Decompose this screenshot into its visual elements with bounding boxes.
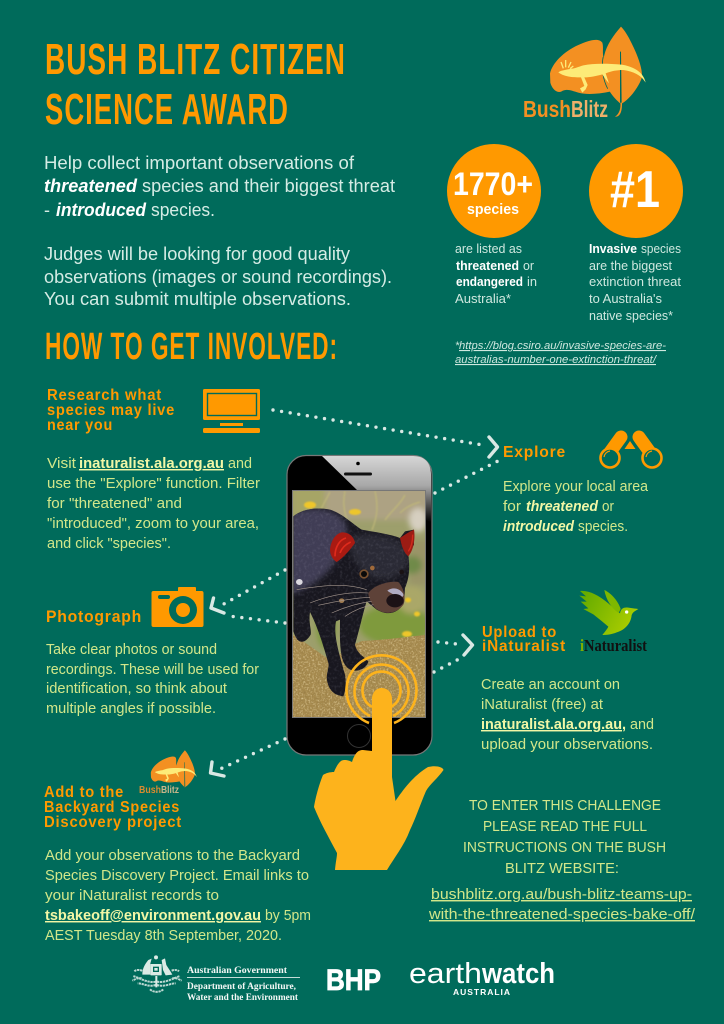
- step: add to project: tsbakeoff@environment.gov.au: [45, 908, 261, 924]
- phone photo: Tasmanian devil: [290, 486, 431, 717]
- callout: enter the challenge: BLITZ WEBSITE:: [505, 861, 619, 877]
- step: photograph: Photograph: [46, 608, 142, 626]
- step: research: and click "species".: [47, 536, 171, 552]
- step: add to project: AEST Tuesday 8th September, 2020.: [45, 928, 282, 944]
- logo: Bush Blitz: Bush: [523, 96, 571, 122]
- logo: small Bush Blitz: Bush: [139, 784, 161, 796]
- callout: enter the challenge: PLEASE READ THE FULL: [483, 819, 647, 835]
- stat: number one threat: to Australia's: [589, 291, 662, 306]
- step: research: Visit: [47, 456, 76, 472]
- arrow: phone to camera lower: [229, 616, 285, 623]
- callout: enter the challenge: bushblitz.org.au/bush-blitz-teams-up-: [431, 887, 692, 903]
- stat: number one threat: are the biggest: [589, 258, 672, 273]
- step: research: [47, 387, 260, 552]
- icon: binoculars: [600, 437, 662, 468]
- footnote link: australias-number-one-extinction-threat/: [455, 354, 657, 366]
- step: upload to iNaturalist: Upload to: [482, 624, 557, 641]
- step: research: Research what: [47, 387, 162, 404]
- touch rings: [346, 655, 416, 723]
- step: add to project: Backyard Species: [44, 799, 180, 816]
- stat: 1770+ species: 1770+: [453, 166, 533, 202]
- step: add to project: Species Discovery Project. Email links to: [45, 868, 309, 884]
- step: photograph: multiple angles if possible.: [46, 701, 216, 717]
- logo: Earthwatch Australia: AUSTRALIA: [453, 987, 510, 997]
- stat: 1770+ species: endangered: [456, 274, 523, 289]
- arrow: research to explore: [273, 410, 498, 457]
- logo: Earthwatch Australia: [409, 958, 555, 997]
- straw mound: [293, 630, 425, 717]
- intro text: You can submit multiple observations.: [44, 289, 351, 309]
- step: upload to iNaturalist: upload your observations.: [481, 737, 653, 753]
- step: explore: threatened: [526, 499, 599, 515]
- logo: BHP: BHP: [326, 964, 381, 997]
- step: research: near you: [47, 417, 113, 434]
- step: research: use the "Explore" function. Filter: [47, 476, 260, 492]
- stat: number one threat: extinction threat: [589, 274, 681, 289]
- stat: 1770+ species: are listed as: [455, 241, 522, 256]
- step: research: "introduced", zoom to your area,: [47, 516, 259, 532]
- stat: number one threat: #1: [610, 161, 660, 219]
- heading: how to get involved: HOW TO GET INVOLVED:: [45, 326, 338, 368]
- step: explore: for: [503, 499, 521, 515]
- logo: small Bush Blitz: [139, 750, 197, 796]
- logo: iNaturalist: [579, 590, 647, 655]
- text: Australian Government: Water and the Environment: [187, 993, 299, 1003]
- step: add to project: your iNaturalist records to: [45, 888, 219, 904]
- arrow: phone to explore: [435, 461, 498, 493]
- callout: enter the challenge: TO ENTER THIS CHALLENGE: [469, 798, 661, 814]
- step: research: species may live: [47, 402, 175, 419]
- step: upload to iNaturalist: [481, 624, 654, 753]
- step: explore: or: [602, 499, 614, 515]
- intro text: Help collect important observations of: [44, 153, 355, 173]
- footnote link: [455, 340, 666, 366]
- step: upload to iNaturalist: inaturalist.ala.org.au,: [481, 717, 626, 733]
- intro text: [44, 153, 395, 309]
- step: explore: introduced: [503, 519, 575, 535]
- step: photograph: identification, so think about: [46, 681, 227, 697]
- step: research: and: [228, 456, 252, 472]
- stat: 1770+ species: threatened: [456, 258, 519, 273]
- arrow: phone to upload: [438, 635, 472, 655]
- intro text: -: [44, 200, 50, 220]
- title: BUSH BLITZ CITIZEN: [45, 35, 346, 84]
- text: Australian Government: Australian Government: [187, 966, 288, 976]
- step: research: for "threatened" and: [47, 496, 182, 512]
- step: upload to iNaturalist: and: [630, 717, 654, 733]
- title: SCIENCE AWARD: [45, 85, 289, 134]
- stat: 1770+ species: species: [467, 201, 519, 218]
- step: research: inaturalist.ala.org.au: [79, 456, 224, 472]
- step: photograph: recordings. These will be used for: [46, 662, 259, 678]
- callout: enter the challenge: with-the-threatened-species-bake-off/: [428, 907, 696, 923]
- step: explore: Explore: [503, 444, 566, 461]
- intro text: species and their biggest threat: [142, 176, 395, 196]
- intro text: Judges will be looking for good quality: [44, 244, 350, 264]
- intro text: observations (images or sound recordings).: [44, 267, 392, 287]
- logo: iNaturalist: iNaturalist: [580, 636, 647, 655]
- stat: 1770+ species: Australia*: [455, 291, 511, 306]
- step: upload to iNaturalist: Create an account on: [481, 677, 620, 693]
- arrow: phone to project: [210, 739, 285, 776]
- step: photograph: Take clear photos or sound: [46, 642, 217, 658]
- arrow: phone to camera upper: [211, 570, 285, 613]
- icon: pointing hand: [314, 688, 444, 870]
- stat: 1770+ species: or: [523, 258, 535, 273]
- logo: Bush Blitz: [523, 27, 646, 122]
- stat: number one threat: [589, 144, 683, 323]
- step: add to project: Add your observations to the Backyard: [45, 848, 300, 864]
- step: explore: species.: [578, 519, 628, 535]
- text: Australian Government: Department of Agriculture,: [187, 982, 297, 992]
- step: upload to iNaturalist: iNaturalist: [482, 638, 566, 655]
- icon: camera: [152, 587, 204, 627]
- arrow: phone to upload lower: [434, 658, 461, 672]
- logo: Earthwatch Australia: watch: [481, 958, 555, 990]
- logo: Australian Government crest: [132, 955, 182, 992]
- intro text: introduced: [56, 200, 147, 220]
- step: add to project: by 5pm: [265, 908, 311, 924]
- stat: number one threat: Invasive: [589, 241, 637, 256]
- step: add to project: Add to the: [44, 784, 124, 801]
- step: add to project: [44, 784, 311, 944]
- logo: Earthwatch Australia: earth: [409, 958, 482, 990]
- footnote link: https://blog.csiro.au/invasive-species-are-: [459, 340, 666, 352]
- stat: 1770+ species: [447, 144, 541, 306]
- stat: 1770+ species: in: [527, 274, 537, 289]
- stat: number one threat: species: [641, 241, 681, 256]
- step: add to project: Discovery project: [44, 814, 182, 831]
- devil body: [290, 505, 417, 698]
- intro text: threatened: [44, 176, 138, 196]
- logo: small Bush Blitz: Blitz: [161, 784, 179, 796]
- text: Australian Government: [187, 966, 300, 1003]
- logo: Bush Blitz: Blitz: [571, 96, 608, 122]
- icon: computer monitor: [203, 389, 260, 433]
- phone: [287, 456, 432, 755]
- step: explore: [503, 444, 649, 535]
- callout: enter the challenge: [428, 798, 696, 923]
- stat: number one threat: native species*: [589, 308, 673, 323]
- intro text: species.: [151, 200, 215, 220]
- callout: enter the challenge: INSTRUCTIONS ON THE BUSH: [463, 840, 666, 856]
- step: upload to iNaturalist: iNaturalist (free) at: [481, 697, 603, 713]
- step: photograph: [46, 608, 259, 717]
- title: [45, 35, 346, 134]
- footnote link: *: [455, 340, 460, 352]
- step: explore: Explore your local area: [503, 479, 649, 495]
